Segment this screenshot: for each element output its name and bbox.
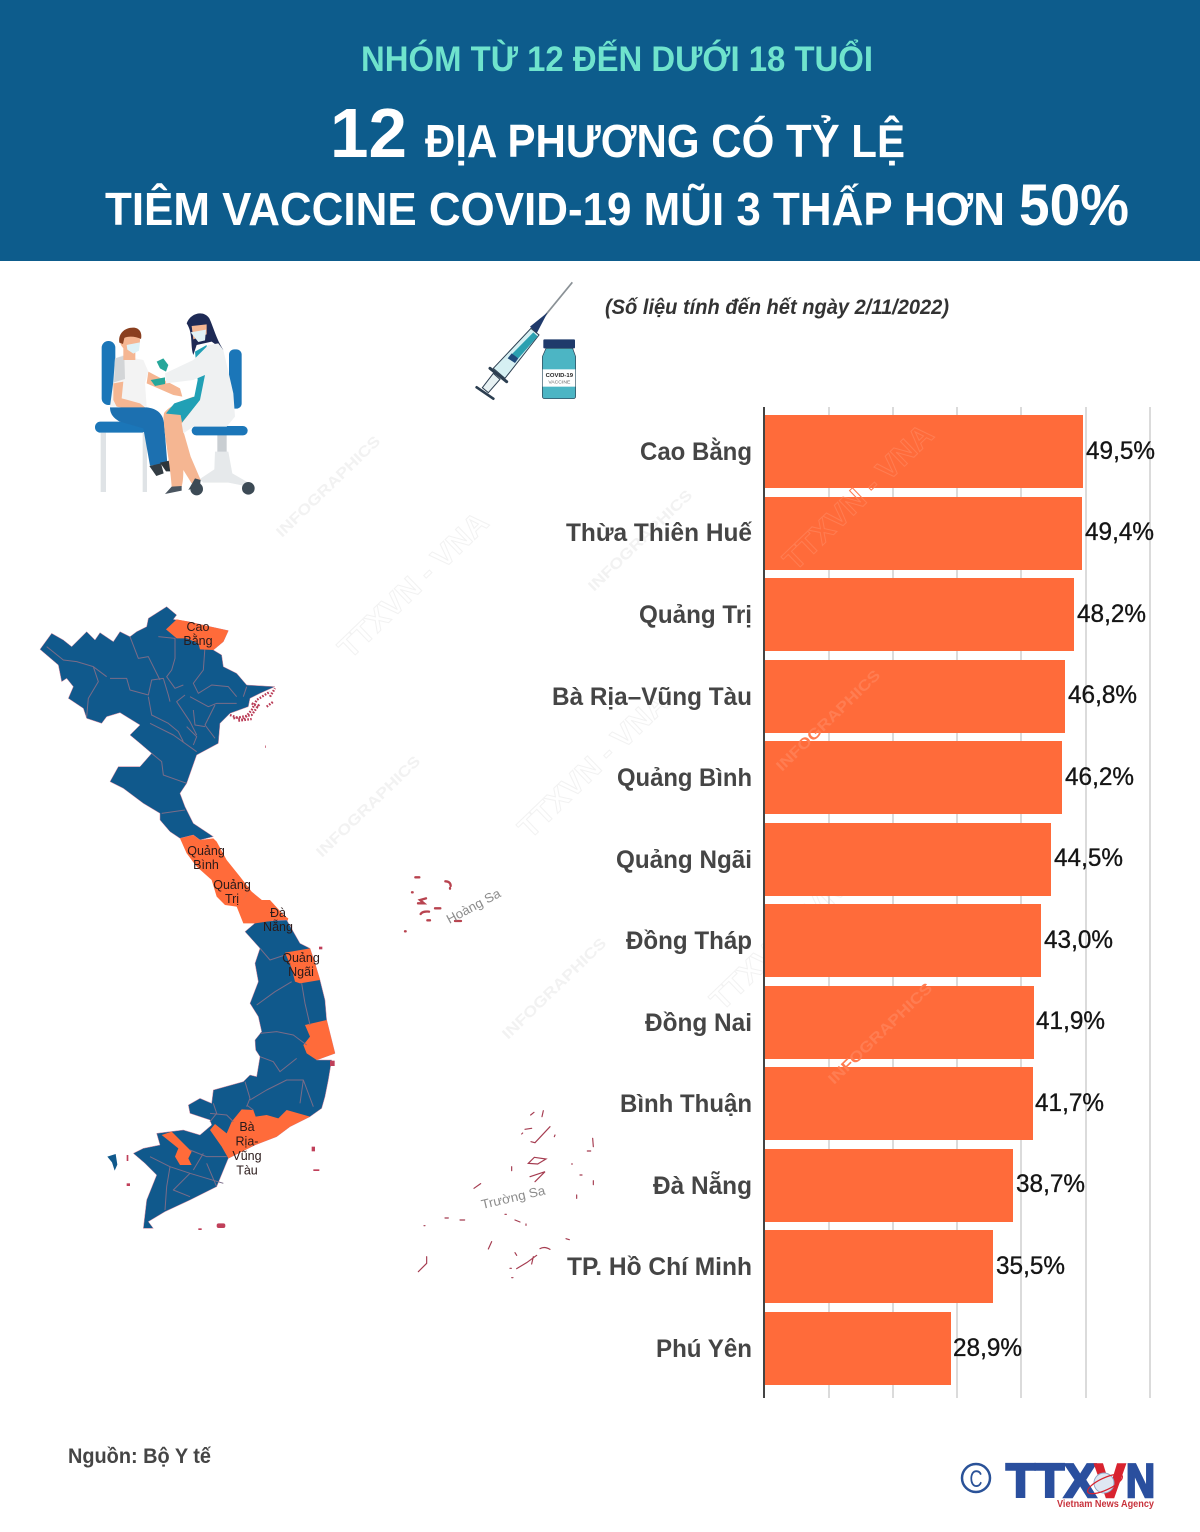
row: TP. Hồ Chí Minh: 35,5% [996,1252,1065,1280]
copyright mark [962,1464,990,1493]
row: Đồng Nai: Đồng Nai [645,1009,752,1037]
title line 1: ĐỊA PHƯƠNG CÓ TỶ LỆ [425,115,905,167]
watermarks: INFOGRAPHICS [273,433,384,541]
heading: age group: NHÓM TỪ 12 ĐẾN DƯỚI 18 TUỔI [361,39,873,79]
map of Vietnam: north [40,607,288,923]
row: Cao Bằng: 49,5% [1086,437,1155,465]
Quảng Ngãi province [285,948,320,983]
row: Quảng Trị: Quảng Trị [639,601,752,629]
title line 2: 50% [1019,173,1129,238]
row: Thừa Thiên Huế [566,497,1154,570]
Bình Thuận, Đồng Nai, TP. Hồ Chí Minh, Bà Rịa–Vũng Tàu [210,1109,310,1158]
map label: Quảng Ngãi: Quảng [282,951,320,965]
north-east islets [230,688,275,747]
row: Quảng Bình: 46,2% [1065,763,1134,791]
row: Thừa Thiên Huế: 49,4% [1085,518,1154,546]
row: Bình Thuận: 41,7% [1035,1089,1104,1117]
icon: vaccine vial: VACCINE [548,379,570,384]
watermarks: TTXVN - VNA [332,506,495,665]
row: TP. Hồ Chí Minh: TP. Hồ Chí Minh [567,1253,752,1281]
tagline: Vietnam News Agency [1057,1499,1154,1510]
row: Quảng Bình: Quảng Bình [617,764,752,792]
globe emblem [1085,1471,1125,1497]
row: Quảng Bình [617,741,1134,814]
map label: Quảng Trị: Trị [225,892,239,906]
row: Phú Yên: 28,9% [953,1334,1022,1362]
illustration: syringe and vaccine vial [477,282,576,399]
bar watermarks: INFOGRAPHICS [825,980,936,1088]
bar chart [552,407,1155,1398]
row: Đà Nẵng: Đà Nẵng [653,1170,752,1200]
Phú Yên province [303,1020,335,1060]
province borders north [47,637,247,813]
row: Cao Bằng: Cao Bằng [640,436,752,466]
row: TP. Hồ Chí Minh [567,1230,1065,1303]
Hoàng Sa and Trường Sa islands [405,877,593,1278]
Đồng Tháp province [162,1132,192,1165]
map of Vietnam: south [107,900,335,1230]
row: Đồng Nai: 41,9% [1036,1007,1105,1035]
title line 2: TIÊM VACCINE COVID-19 MŨI 3 THẤP HƠN [105,183,1005,235]
southern provinces [133,920,335,1228]
row: Bình Thuận: Bình Thuận [620,1090,752,1118]
bar watermarks: INFOGRAPHICS [773,667,884,775]
Quảng Bình, Quảng Trị provinces [180,835,288,923]
watermarks: TTXVN - VNA [512,686,675,845]
icon: boy [110,328,182,476]
wordmark: V [1095,1454,1126,1507]
Trường Sa islets [418,1111,593,1278]
row: Quảng Ngãi [616,823,1123,896]
icon: vaccine vial [542,339,576,399]
wordmark [1006,1454,1155,1507]
map label: Cao Bằng: Cao [187,620,209,634]
map label: Bà Rịa-Vũng Tàu: Vũng [232,1149,262,1163]
row: Đồng Tháp: 43,0% [1044,926,1113,954]
watermarks: TTXVN - VNA [704,858,867,1017]
row: Quảng Trị: 48,2% [1077,600,1146,628]
map label: Quảng Bình: Quảng [187,844,225,858]
Đà Nẵng strip [222,900,287,923]
source note: Nguồn: Bộ Y tế [68,1445,211,1468]
Hoàng Sa islets [405,877,461,931]
row: Bà Rịa–Vũng Tàu: 46,8% [1068,681,1137,709]
row: Bà Rịa–Vũng Tàu: Bà Rịa–Vũng Tàu [552,683,752,711]
row: Phú Yên: Phú Yên [656,1335,752,1363]
row: Quảng Ngãi: 44,5% [1054,844,1123,872]
label: Hoàng Sa: Hoàng Sa [444,885,504,927]
map label: Đà Nẵng: Đà [270,906,286,920]
map label: Bà Rịa-Vũng Tàu: Tàu [236,1164,258,1178]
label: Trường Sa: Trường Sa [480,1182,547,1212]
row: Đà Nẵng [653,1149,1085,1222]
axis line [763,407,765,1398]
row: Quảng Trị [639,578,1146,651]
bar watermarks [773,418,940,1088]
Cao Bằng province [166,619,228,650]
copyright mark: C [970,1466,982,1493]
row: Cao Bằng [640,415,1155,488]
wordmark: N [1126,1454,1155,1507]
date note: (Số liệu tính đến hết ngày 2/11/2022) [605,296,949,319]
illustration: doctor vaccinating a boy [95,313,255,495]
grid lines [829,407,1150,1398]
map label: Quảng Ngãi: Ngãi [288,965,314,979]
row: Đồng Tháp: Đồng Tháp [626,927,752,955]
icon: vaccine vial: COVID-19 [546,373,573,379]
icon: doctor [151,313,235,494]
bar watermarks: TTXVN - VNA [777,418,940,577]
province borders south [150,948,313,1210]
wordmark: TTX [1006,1454,1096,1507]
map label: Bà Rịa-Vũng Tàu: Bà [239,1120,255,1134]
row: Đồng Nai [645,986,1105,1059]
row: Phú Yên [656,1312,1022,1385]
row: Đồng Tháp [626,904,1113,977]
row: Đà Nẵng: 38,7% [1016,1170,1085,1198]
title line 1 [330,94,905,172]
row: Bà Rịa–Vũng Tàu [552,660,1137,733]
map label: Quảng Bình: Bình [193,858,219,872]
Southern islets [107,947,335,1230]
icon: patient chair [95,341,147,492]
row: Quảng Ngãi: Quảng Ngãi [616,846,752,874]
map label: Bà Rịa-Vũng Tàu: Rịa- [236,1134,258,1148]
map label: Cao Bằng: Bằng [183,633,213,648]
header banner [0,0,1200,261]
map province labels [183,620,320,1178]
watermarks: INFOGRAPHICS [585,487,696,595]
map label: Đà Nẵng: Nẵng [263,919,293,934]
icon: syringe [477,282,572,399]
northern provinces [40,607,275,840]
icon: doctor chair [190,349,255,495]
logo: TTXVN [962,1454,1155,1510]
watermarks: INFOGRAPHICS [313,753,424,861]
row: Thừa Thiên Huế: Thừa Thiên Huế [566,519,752,547]
title line 1: 12 [330,94,407,172]
watermarks [273,433,867,1043]
watermarks: INFOGRAPHICS [499,935,610,1043]
row: Bình Thuận [620,1067,1104,1140]
map label: Quảng Trị: Quảng [213,878,251,892]
